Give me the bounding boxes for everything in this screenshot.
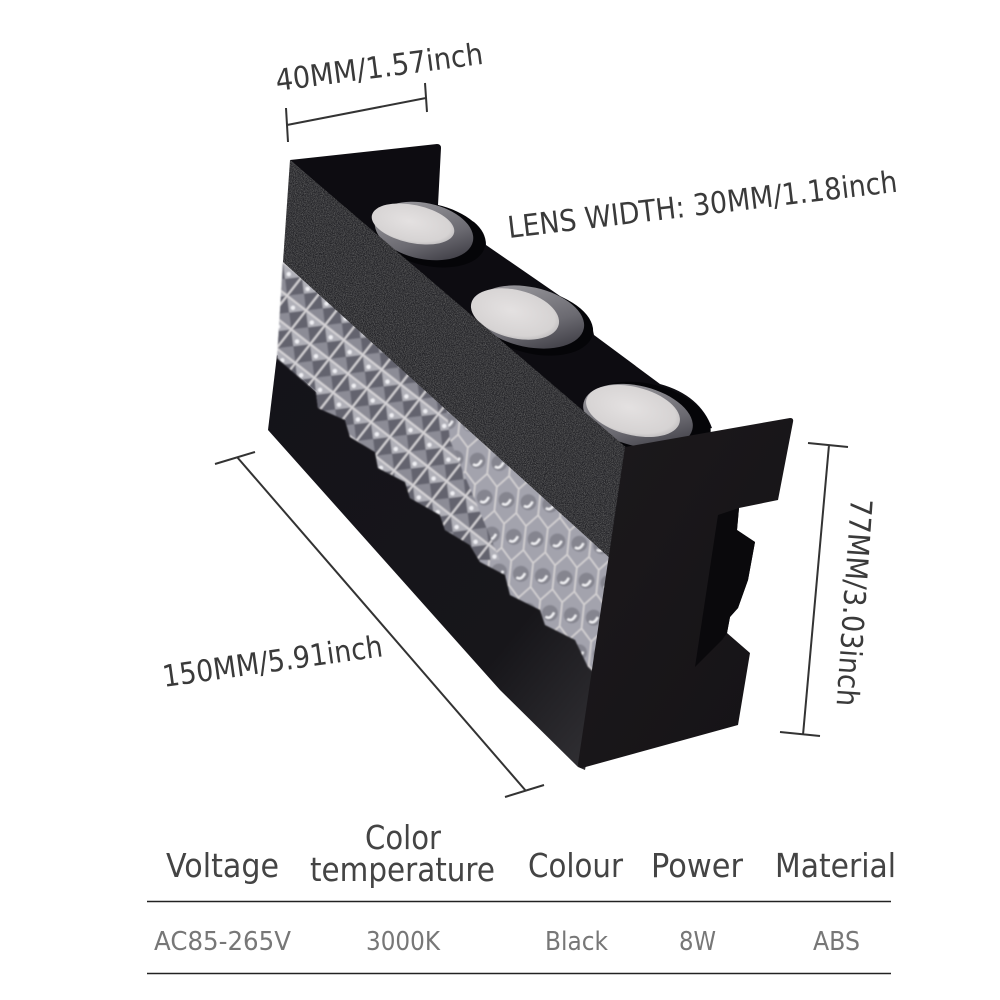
product: linear wall light xyxy=(268,144,793,770)
dimension: depth 40MM: 40MM/1.57inch xyxy=(273,37,485,99)
dimension: lens width: LENS WIDTH: 30MM/1.18inch xyxy=(506,165,899,246)
lens 2 xyxy=(466,276,599,366)
lens 3 xyxy=(575,369,719,471)
lower black front panel xyxy=(268,355,605,770)
table values: AC85-265V xyxy=(154,927,291,957)
lens 1 xyxy=(368,193,491,277)
dimension: depth 40MM xyxy=(273,37,485,142)
table values: 8W xyxy=(679,927,716,957)
dimension: height 77MM: 77MM/3.03inch xyxy=(829,497,878,707)
end face recess xyxy=(695,508,755,667)
table headers: Colour xyxy=(528,846,623,885)
table headers: Power xyxy=(651,846,743,885)
dimension: length 150MM: 150MM/5.91inch xyxy=(160,629,385,695)
table headers: Voltage xyxy=(166,846,279,885)
table headers xyxy=(166,818,896,889)
end face xyxy=(578,418,793,768)
specification table xyxy=(147,818,896,974)
table values: 3000K xyxy=(366,927,441,957)
dimension: length 150MM xyxy=(160,452,544,797)
table headers: Color xyxy=(365,818,441,857)
table values: ABS xyxy=(813,927,860,957)
back flap and lens track xyxy=(290,144,712,450)
table values xyxy=(154,927,860,957)
prismatic hexagon diffuser xyxy=(277,262,615,675)
textured upper front panel xyxy=(283,160,628,560)
table headers: temperature xyxy=(310,850,495,889)
table values: Black xyxy=(545,927,608,957)
table headers: Material xyxy=(775,846,896,885)
dimension: height 77MM xyxy=(780,443,878,736)
